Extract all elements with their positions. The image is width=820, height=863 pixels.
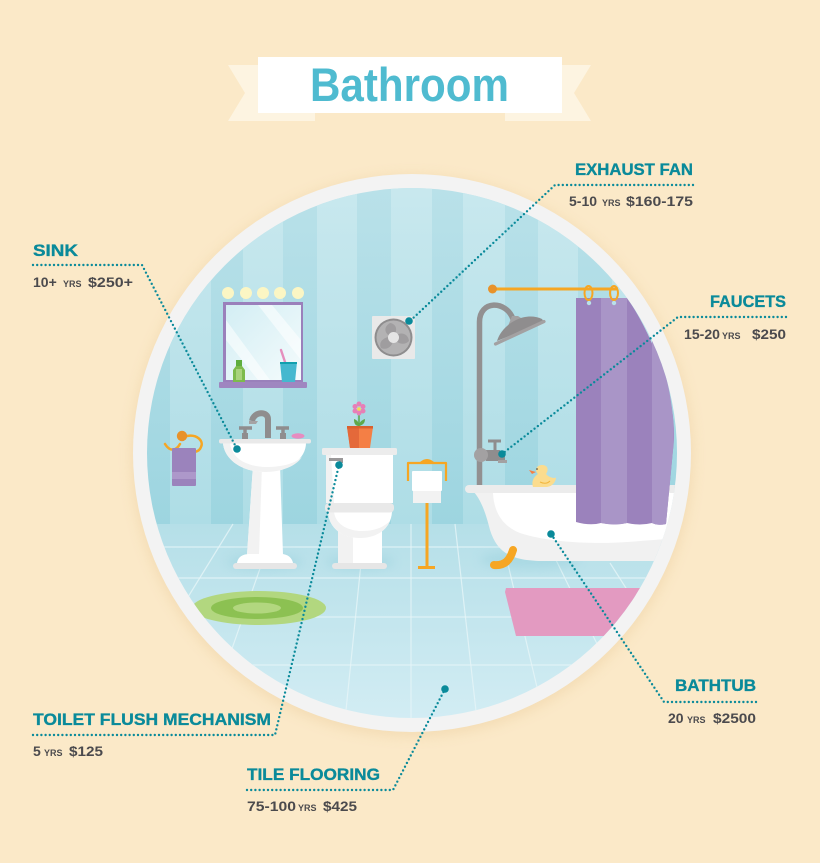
flush lever	[329, 458, 343, 463]
curtain rings	[584, 286, 618, 300]
sink	[219, 413, 311, 569]
callout: bathtub: $2500	[713, 710, 756, 726]
pink bath mat	[505, 588, 640, 636]
callout: faucets	[498, 292, 786, 458]
title banner	[228, 57, 591, 121]
towel ring and towel	[165, 431, 202, 486]
toilet	[322, 448, 397, 569]
tile floor	[140, 524, 690, 724]
callout: faucets: YRS	[722, 331, 741, 341]
flower pot	[347, 402, 373, 448]
callout: tile flooring: 75-100	[247, 798, 296, 814]
rubber duck	[529, 465, 556, 487]
callout: bathtub: BATHTUB	[675, 676, 756, 695]
callout: faucets: 15-20	[684, 326, 720, 342]
exhaust fan	[372, 316, 415, 359]
mirror	[219, 302, 307, 388]
callout: sink: 10+	[33, 274, 57, 290]
callout: exhaust fan: 5-10	[569, 193, 597, 209]
faucet	[239, 413, 289, 439]
bathtub	[465, 485, 680, 565]
callout: sink	[33, 241, 241, 453]
toothbrush and cup	[280, 350, 297, 382]
curtain holes	[587, 301, 616, 305]
callout: faucets: FAUCETS	[710, 292, 786, 311]
callout: faucets: $250	[752, 326, 786, 342]
callout: bathtub: 20	[668, 710, 684, 726]
title: Bathroom	[310, 58, 509, 111]
callout: sink: YRS	[63, 279, 82, 289]
bathroom scene	[140, 180, 690, 724]
fixture floor shadows	[227, 551, 580, 570]
callout: tile flooring: $425	[323, 798, 357, 814]
callout: bathtub	[547, 530, 756, 726]
callout: exhaust fan: $160-175	[626, 193, 693, 209]
soap	[292, 433, 304, 439]
callout: toilet flush mechanism: YRS	[44, 748, 63, 758]
callout: toilet flush mechanism: TOILET FLUSH MECHANISM	[33, 710, 271, 729]
tub foot	[494, 550, 513, 565]
callout: toilet flush mechanism	[33, 461, 343, 759]
toilet paper stand	[408, 459, 446, 569]
callout: tile flooring: TILE FLOORING	[247, 765, 380, 784]
callout: toilet flush mechanism: 5	[33, 743, 41, 759]
callout: exhaust fan: YRS	[602, 198, 621, 208]
callout: exhaust fan: EXHAUST FAN	[575, 160, 693, 179]
circle frame	[132, 174, 692, 736]
callout: tile flooring: YRS	[298, 803, 317, 813]
callout: tile flooring	[247, 685, 449, 814]
bottle	[233, 360, 245, 382]
wall stripes	[140, 180, 690, 525]
shower faucet	[486, 450, 500, 461]
shower rod	[488, 284, 618, 294]
green bath mat	[192, 591, 326, 625]
vanity lights	[222, 287, 304, 299]
shower	[474, 305, 544, 486]
callout: sink: $250+	[88, 274, 133, 290]
callout: toilet flush mechanism: $125	[69, 743, 103, 759]
callout: sink: SINK	[33, 241, 79, 260]
callout: bathtub: YRS	[687, 715, 706, 725]
shower curtain	[576, 286, 674, 525]
callout: exhaust fan	[405, 160, 693, 325]
